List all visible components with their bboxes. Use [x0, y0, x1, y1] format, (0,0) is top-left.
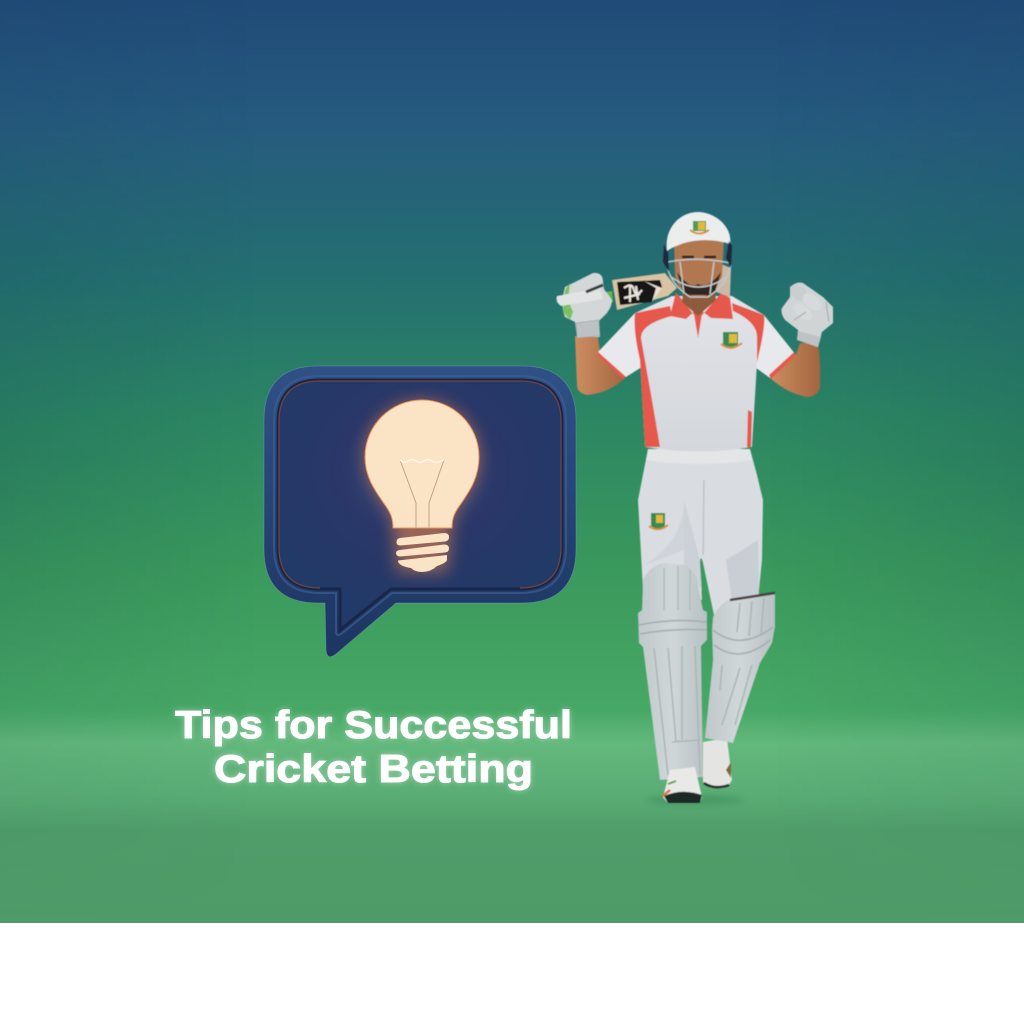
white band along bottom: [0, 923, 1024, 1024]
shirt sleeves: [598, 313, 645, 377]
right glove: [781, 282, 833, 347]
front shoe: [663, 767, 702, 803]
icon: glowing light bulb: [365, 400, 479, 572]
shirt: [597, 292, 796, 452]
player arms: [575, 336, 820, 397]
cricket bat behind shoulder: [606, 273, 677, 310]
cricket player figure: [556, 212, 833, 805]
speech bubble with light bulb icon: [264, 366, 576, 657]
shirt torso: [635, 296, 764, 452]
trouser badge: [649, 513, 668, 530]
chest badge: [721, 332, 742, 349]
helmet badge: [690, 221, 709, 234]
collar: [670, 292, 733, 320]
trousers: [638, 449, 763, 620]
left glove: [556, 273, 612, 338]
title: Tips for Successful: [175, 704, 572, 747]
rear shoe: [703, 738, 732, 788]
title: [175, 704, 572, 791]
left leg pad and shoe: [638, 563, 707, 803]
head with helmet: [663, 212, 732, 316]
ground shadow: [647, 795, 743, 805]
helmet: [667, 212, 730, 251]
face: [674, 240, 724, 297]
title: Cricket Betting: [214, 748, 533, 791]
right leg pad and shoe: [703, 593, 775, 788]
red shoulder panels and side panels: [635, 306, 672, 447]
front leg pad: [638, 563, 707, 780]
helmet grille: [667, 259, 731, 297]
speech bubble body: [264, 366, 576, 657]
bulb screw base: [396, 533, 449, 572]
title: Cricket Betting: [214, 748, 533, 791]
title: Tips for Successful: [175, 704, 572, 747]
bulb filament: [400, 460, 444, 528]
neck and beard: [682, 280, 716, 316]
rear leg pad: [705, 593, 775, 743]
